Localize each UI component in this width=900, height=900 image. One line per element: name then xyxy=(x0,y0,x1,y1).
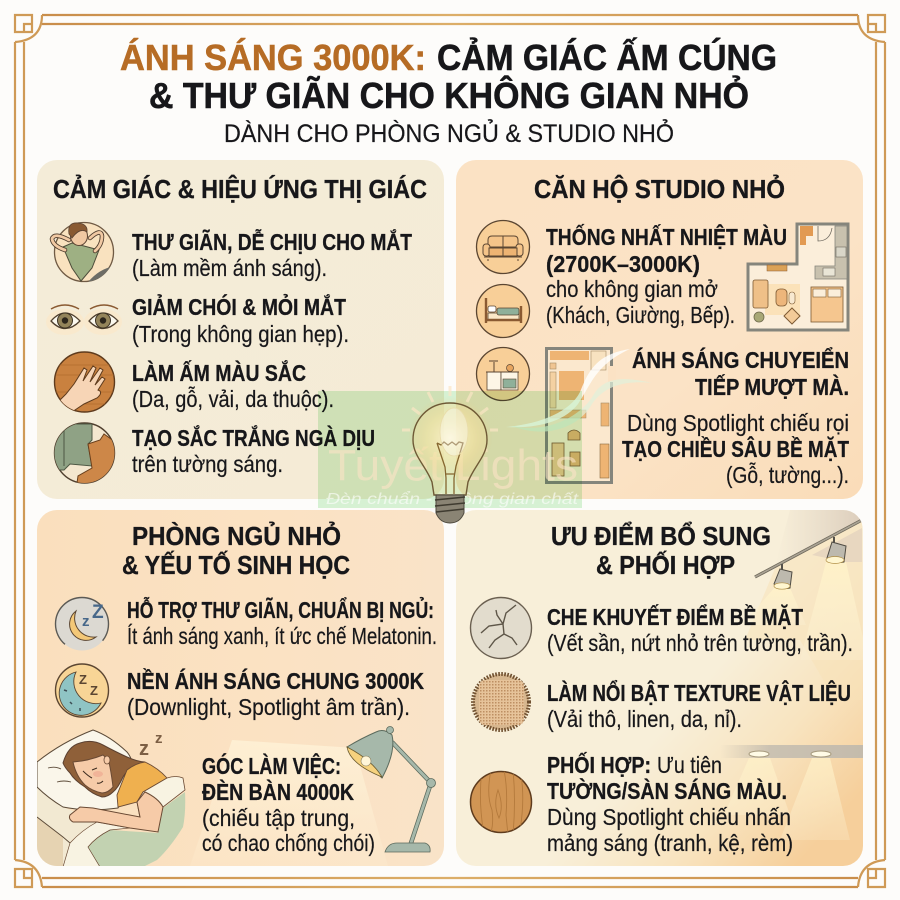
text: hide defects: (Vết sần, nứt nhỏ trên tường, trần). xyxy=(547,630,853,656)
lamp light beam xyxy=(206,740,370,823)
text: work corner xyxy=(202,752,375,856)
illustration: sleeping woman: z xyxy=(155,730,162,747)
text: highlight texture: (Vải thô, linen, da, nỉ). xyxy=(547,706,742,732)
text: smooth light transition: TẠO CHIỀU SÂU BỀ MẶT xyxy=(622,435,849,462)
text: warm colours: (Da, gỗ, vải, da thuộc). xyxy=(132,386,334,412)
text: smooth light transition: ÁNH SÁNG CHUYEIỂN xyxy=(632,346,849,373)
icon: hand on wood xyxy=(54,352,114,412)
panel: visual effects xyxy=(37,160,444,499)
illustration: sleeping woman xyxy=(37,730,185,867)
text: highlight texture xyxy=(547,679,851,732)
text: reduce glare: GIẢM CHÓI & MỎI MẮT xyxy=(132,292,346,320)
icon: moon clock: Z xyxy=(90,683,98,698)
heading: small bedroom: PHÒNG NGỦ NHỎ xyxy=(132,521,341,551)
text: smooth light transition: (Gỗ, tường...). xyxy=(726,462,849,488)
heading: additional benefits xyxy=(551,521,771,580)
text: ivory white xyxy=(132,424,375,477)
text: relax: THƯ GIÃN, DỄ CHỊU CHO MẮT xyxy=(132,227,412,255)
icon: moon clock: Z xyxy=(79,672,87,687)
heading: visual effects: CẢM GIÁC & HIỆU ỨNG THỊ GIÁC xyxy=(53,174,427,204)
text: coordination: mảng sáng (tranh, kệ, rèm) xyxy=(547,830,793,856)
icon: wood disc xyxy=(470,770,532,835)
icon: sofa xyxy=(476,220,530,274)
panel: additional benefits xyxy=(456,510,868,866)
text: smooth light transition: Dùng Spotlight chiếu rọi xyxy=(627,410,849,436)
icon: relaxed man xyxy=(52,222,116,290)
text: smooth light transition: TIẾP MƯỢT MÀ. xyxy=(695,373,849,400)
text: reduce glare xyxy=(132,292,349,347)
text: work corner: có chao chống chói) xyxy=(202,830,375,856)
text: smooth light transition xyxy=(622,346,849,488)
watermark: Tuyết Lights: Đèn chuẩn - Không gian chất xyxy=(326,490,579,508)
heading: small bedroom: & YẾU TỐ SINH HỌC xyxy=(122,550,350,580)
text: unify colour temperature: (Khách, Giường, Bếp). xyxy=(546,302,735,328)
text: general lighting xyxy=(127,667,424,720)
watermark: Tuyết Lights: Tuyết Lights xyxy=(328,441,578,490)
text: coordination: Dùng Spotlight chiếu nhấn xyxy=(547,804,791,830)
text: work corner: GÓC LÀM VIỆC: xyxy=(202,752,341,779)
heading: additional benefits: & PHỐI HỢP xyxy=(596,550,735,580)
text: unify colour temperature: (2700K–3000K) xyxy=(546,251,700,277)
text: coordination xyxy=(547,751,793,856)
title: & THƯ GIÃN CHO KHÔNG GIAN NHỎ xyxy=(149,74,749,116)
text: relaxation xyxy=(127,595,437,649)
title: CẢM GIÁC ẤM CÚNG xyxy=(437,36,777,78)
heading: additional benefits: ƯU ĐIỂM BỔ SUNG xyxy=(551,521,771,551)
text: reduce glare: (Trong không gian hẹp). xyxy=(132,321,349,347)
text: unify colour temperature xyxy=(546,223,787,328)
text: hide defects xyxy=(547,603,853,656)
heading: small bedroom xyxy=(122,521,350,580)
illustration: sleeping woman: z xyxy=(139,738,149,760)
chart: open studio floor plan xyxy=(748,224,848,330)
icon: moon and zzz: z xyxy=(82,613,90,630)
text: coordination: TƯỜNG/SÀN SÁNG MÀU. xyxy=(547,777,787,804)
text: hide defects: CHE KHUYẾT ĐIỂM BỀ MẶT xyxy=(547,603,803,630)
text: warm colours xyxy=(132,359,334,412)
text: unify colour temperature: cho không gian mở xyxy=(546,276,718,302)
text: relax xyxy=(132,227,412,281)
watermark: Tuyết Lights xyxy=(318,391,582,508)
icon: kitchen xyxy=(476,348,530,400)
icon: eyes xyxy=(46,305,122,335)
text: ivory white: TẠO SẮC TRẮNG NGÀ DỊU xyxy=(132,424,375,451)
heading: small studio: CĂN HỘ STUDIO NHỎ xyxy=(534,174,785,204)
icon: moon and zzz xyxy=(56,598,108,650)
text: general lighting: NỀN ÁNH SÁNG CHUNG 3000K xyxy=(127,667,424,694)
text: relax: (Làm mềm ánh sáng). xyxy=(132,255,327,281)
recessed downlights xyxy=(720,745,863,840)
icon: desk lamp xyxy=(347,726,436,852)
title: ÁNH SÁNG 3000K: xyxy=(120,37,426,78)
icon: central light bulb xyxy=(402,386,498,523)
icon: woven texture xyxy=(473,674,529,730)
panel: small bedroom xyxy=(37,510,444,867)
panel: small studio xyxy=(456,160,863,499)
text: general lighting: (Downlight, Spotlight âm trần). xyxy=(127,694,410,720)
title xyxy=(120,36,777,116)
text: work corner: (chiếu tập trung, xyxy=(202,805,355,831)
icon: fabric swatches xyxy=(54,422,116,484)
subtitle: DÀNH CHO PHÒNG NGỦ & STUDIO NHỎ xyxy=(224,118,674,148)
text: ivory white: trên tường sáng. xyxy=(132,451,283,477)
icon: bed xyxy=(476,284,530,338)
chart: narrow studio floor plan with light ribbons xyxy=(506,348,652,482)
text: relaxation: Ít ánh sáng xanh, ít ức chế Melatonin. xyxy=(127,623,437,649)
icon: cracked wall xyxy=(470,598,532,658)
text: unify colour temperature: THỐNG NHẤT NHIỆT MÀU xyxy=(546,223,787,250)
text: work corner: ĐÈN BÀN 4000K xyxy=(202,778,354,805)
text: coordination: PHỐI HỢP: xyxy=(547,751,651,778)
track spotlights xyxy=(746,510,863,662)
text: warm colours: LÀM ẤM MÀU SẮC xyxy=(132,359,306,386)
icon: moon clock xyxy=(56,664,108,717)
text: coordination: Ưu tiên xyxy=(657,752,722,778)
icon: moon and zzz: Z xyxy=(92,602,104,623)
text: relaxation: HỖ TRỢ THƯ GIÃN, CHUẨN BỊ NGỦ: xyxy=(127,595,434,623)
